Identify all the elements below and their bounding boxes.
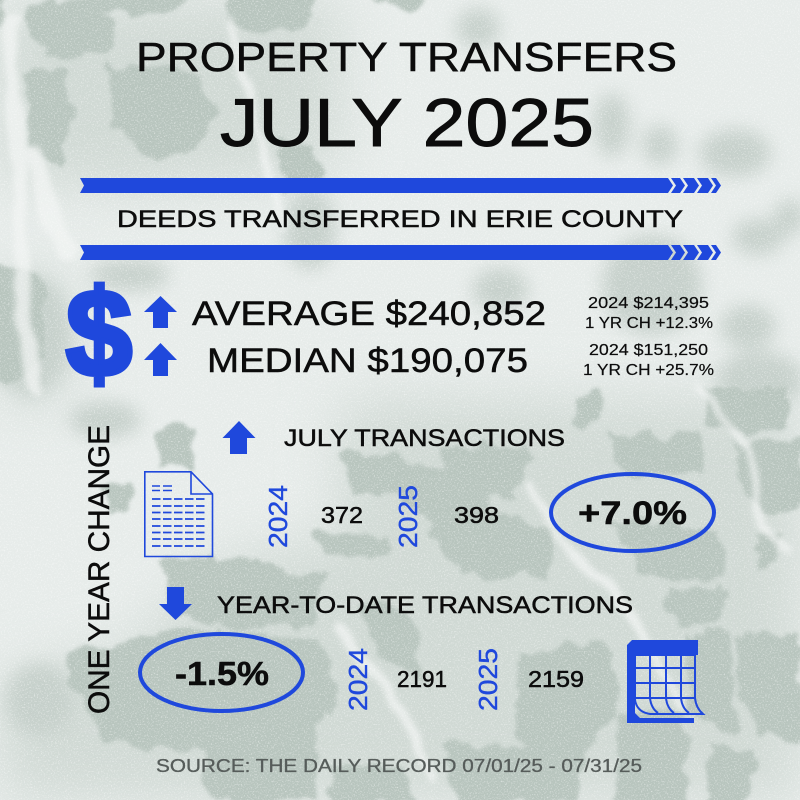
- source line: SOURCE: THE DAILY RECORD 07/01/25 - 07/31/25: [156, 756, 642, 776]
- july 2024 label: 2024: [263, 485, 293, 548]
- average comparison: [585, 295, 713, 332]
- title: [136, 34, 677, 161]
- callout: year-to-date change: -1.5%: [175, 655, 269, 692]
- title: PROPERTY TRANSFERS: [136, 34, 677, 80]
- average price: AVERAGE $240,852: [192, 295, 546, 333]
- average comparison: 1 YR CH +12.3%: [585, 315, 713, 332]
- title: JULY 2025: [220, 85, 594, 161]
- year-to-date heading: YEAR-TO-DATE TRANSACTIONS: [217, 592, 633, 619]
- july 2025 value: 398: [454, 502, 499, 528]
- median comparison: 2024 $151,250: [589, 342, 708, 359]
- july 2024 value: 372: [321, 502, 363, 528]
- top arrow banner: [80, 178, 721, 193]
- median comparison: [583, 342, 714, 379]
- icon: dollar sign: $: [66, 266, 132, 403]
- ytd 2025 value: 2159: [528, 666, 584, 692]
- icon: average up arrow: [144, 296, 177, 328]
- vertical label: one year change: ONE YEAR CHANGE: [83, 425, 116, 714]
- callout: year-to-date change: [140, 634, 303, 711]
- icon: document: [145, 472, 212, 556]
- callout: july change: +7.0%: [578, 495, 687, 531]
- icon: july up arrow: [222, 421, 256, 454]
- ytd 2025 label: 2025: [473, 648, 503, 711]
- july transactions heading: JULY TRANSACTIONS: [284, 425, 565, 452]
- ytd 2024 label: 2024: [343, 648, 373, 711]
- icon: calendar: [627, 640, 703, 723]
- july 2025 label: 2025: [393, 485, 423, 548]
- callout: july change: [551, 474, 714, 551]
- median price: MEDIAN $190,075: [207, 342, 528, 380]
- ytd 2024 value: 2191: [397, 666, 447, 692]
- average comparison: 2024 $214,395: [588, 295, 709, 312]
- bottom arrow banner: [80, 245, 721, 260]
- subtitle: DEEDS TRANSFERRED IN ERIE COUNTY: [117, 206, 683, 233]
- icon: year-to-date down arrow: [159, 587, 192, 620]
- median comparison: 1 YR CH +25.7%: [583, 362, 714, 379]
- icon: median up arrow: [144, 343, 177, 376]
